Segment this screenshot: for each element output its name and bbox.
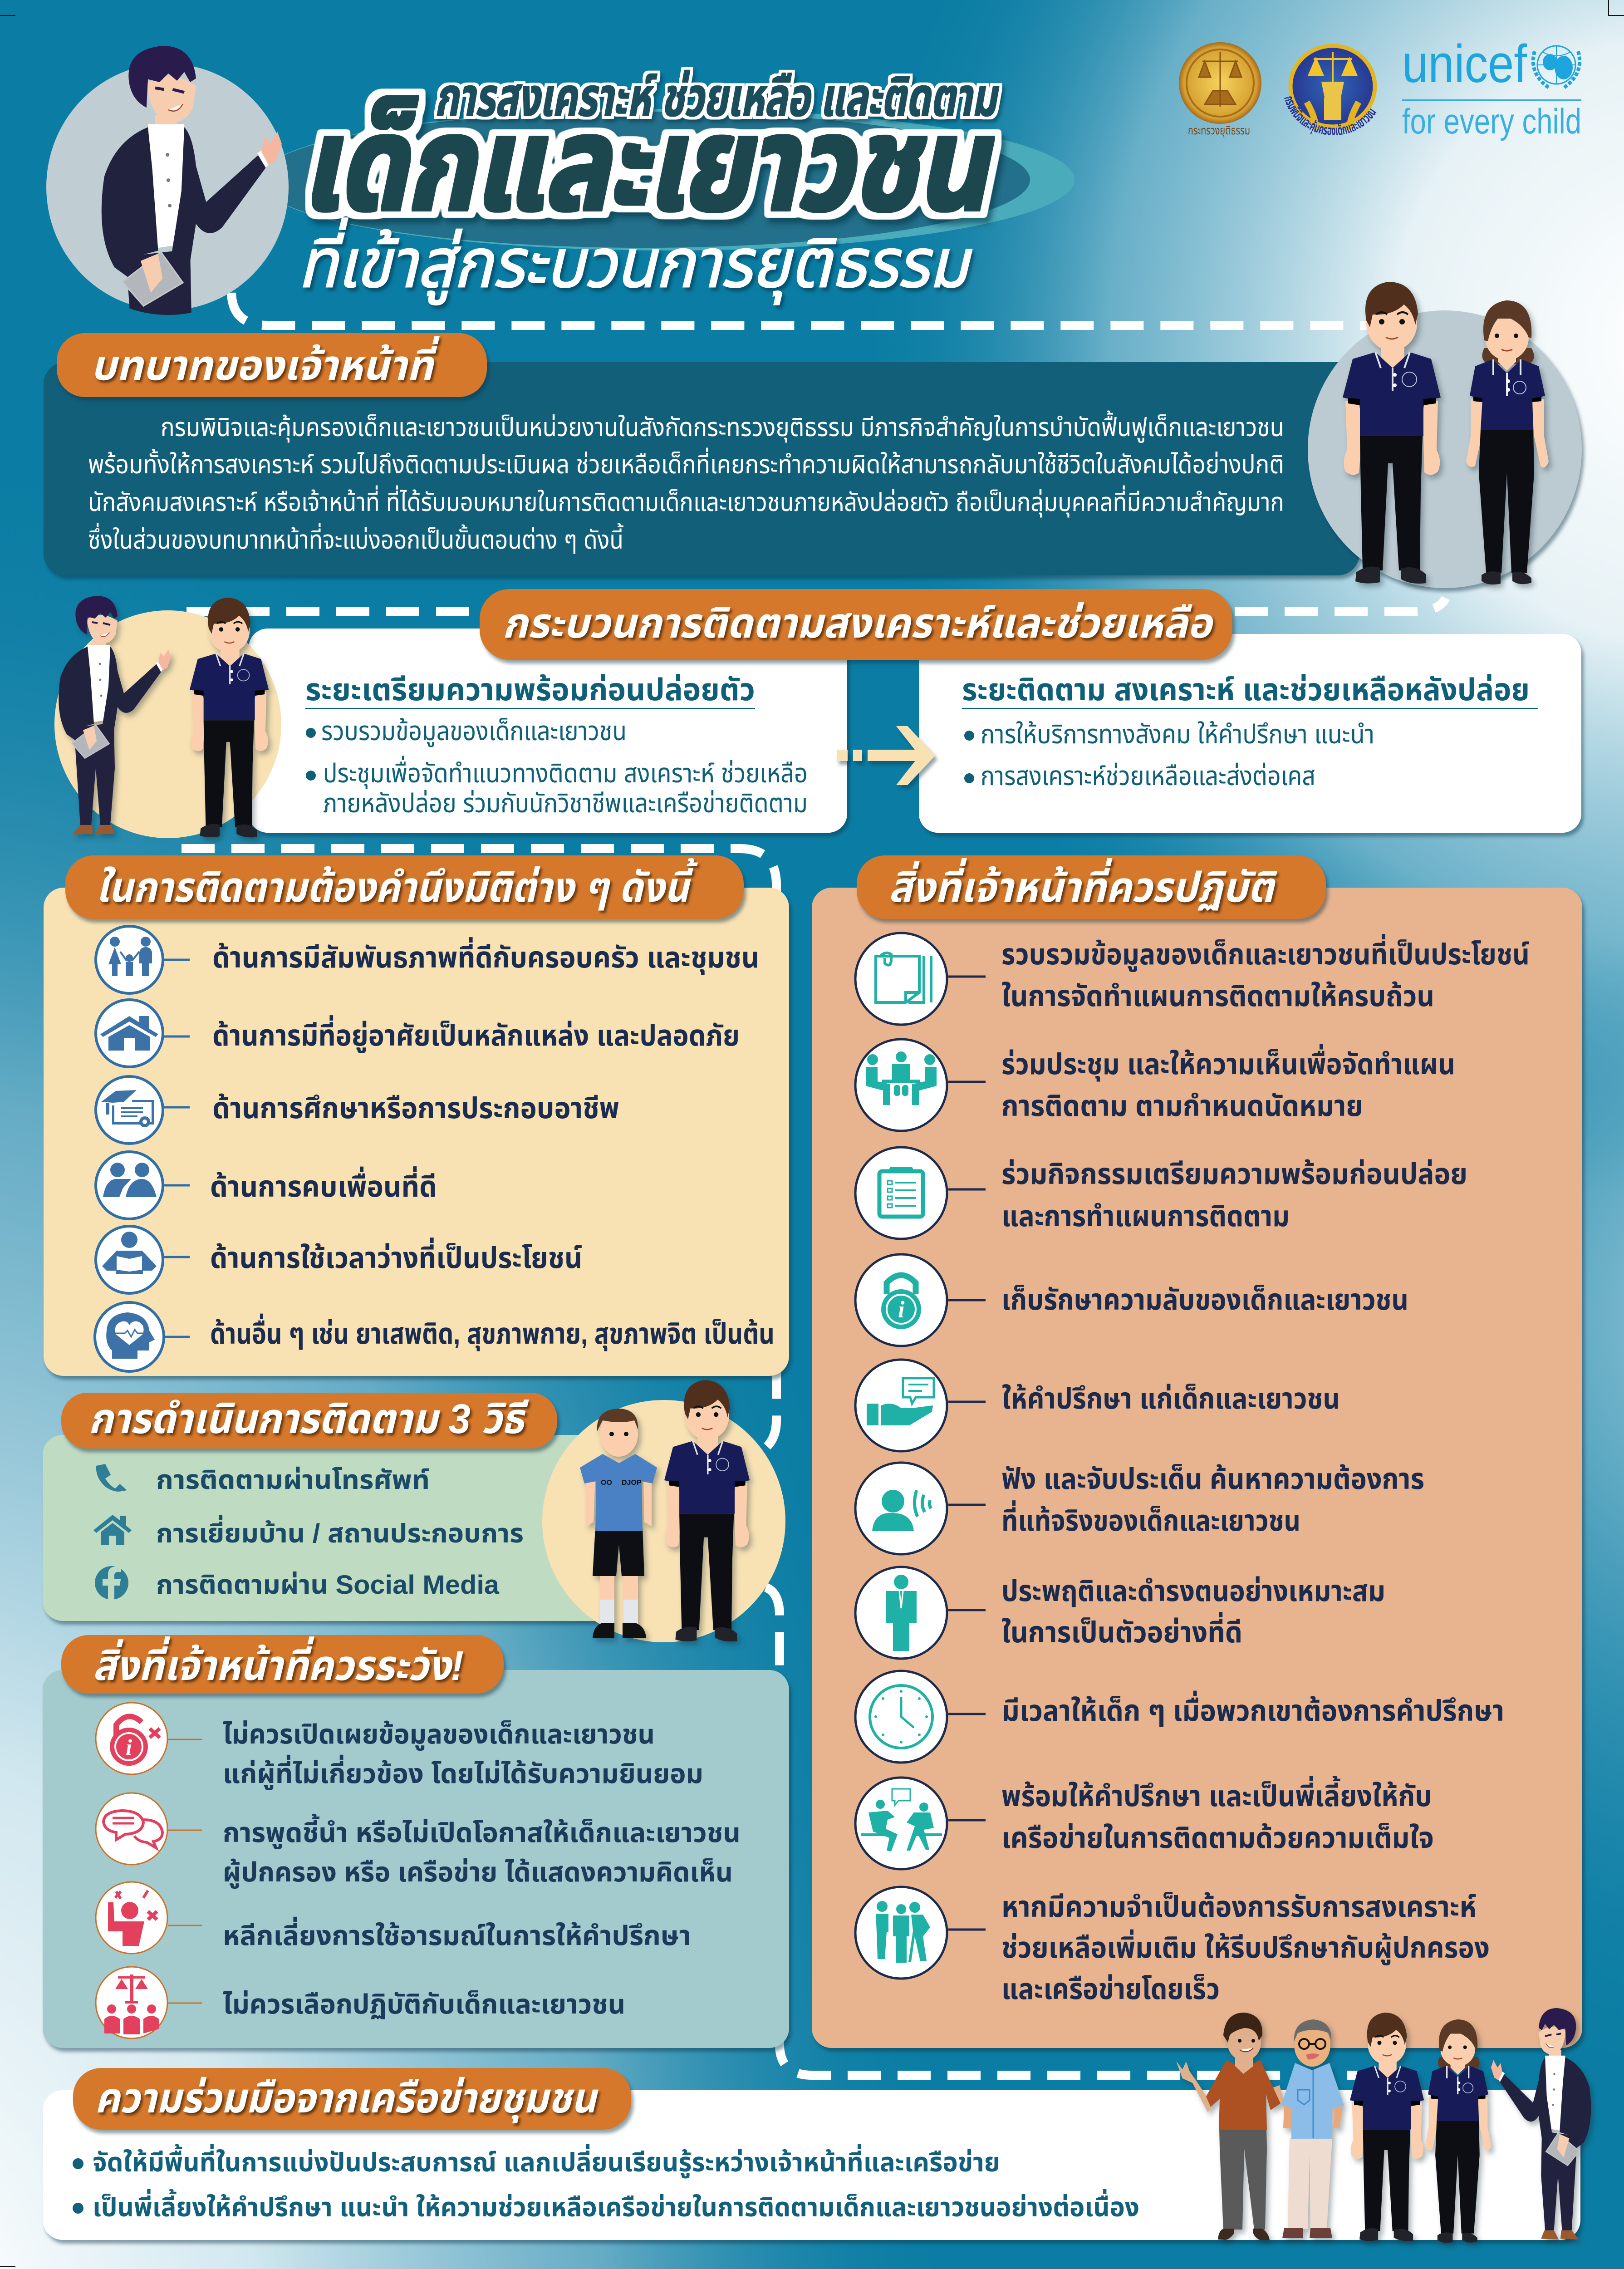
item 3 checklist [855, 1147, 1467, 1239]
item 4 lock [855, 1254, 1408, 1346]
logo: unicef [1402, 34, 1581, 141]
item 10 group [855, 1887, 1490, 2005]
figure: older man in blue shirt [1281, 2019, 1344, 2238]
body text: กรมพินิจและคุ้มครองเด็กและเยาวชนเป็นหน่วยงานในสังกัดกระทรวงยุติธรรม มีภารกิจสำคัญในการบำบัดฟื้นฟูเด็กและเยาวชน [161, 410, 1284, 443]
item 7 role model: ในการเป็นตัวอย่างที่ดี [1001, 1612, 1242, 1649]
method: social media: การติดตามผ่าน Social Media [156, 1570, 500, 1600]
phase bullets: การให้บริการทางสังคม ให้คำปรึกษา แนะนำ [981, 720, 1374, 749]
item 10 group: และเครือข่ายโดยเร็ว [1001, 1973, 1220, 2005]
item: education [96, 1076, 619, 1144]
heading: what officers should do [857, 855, 1326, 919]
item 9 mentor: เครือข่ายในการติดตามด้วยความเต็มใจ [1001, 1822, 1434, 1854]
title line 3: ที่เข้าสู่กระบวนการยุติธรรม [298, 218, 972, 305]
figure: boy: OO [601, 1479, 612, 1487]
item 2 meeting: ร่วมประชุม และให้ความเห็นเพื่อจัดทำแผน [1001, 1044, 1455, 1082]
item 7 role model: ประพฤติและดำรงตนอย่างเหมาะสม [1001, 1575, 1385, 1607]
item 4 lock: เก็บรักษาความลับของเด็กและเยาวชน [1001, 1283, 1408, 1316]
heading: what officers should do: สิ่งที่เจ้าหน้าที่ควรปฏิบัติ [888, 858, 1277, 911]
network bullets: จัดให้มีพื้นที่ในการแบ่งปันประสบการณ์ แลกเปลี่ยนเรียนรู้ระหว่างเจ้าหน้าที่และเครือข่าย [93, 2144, 1000, 2179]
title line 1: การสงเคราะห์ ช่วยเหลือ และติดตาม [435, 68, 999, 128]
logo: ministry of justice: กระทรวงยุติธรรม [1188, 123, 1250, 138]
item 5 advice [855, 1360, 1340, 1451]
caution: discrimination [96, 1967, 625, 2038]
item 8 clock [855, 1671, 1504, 1763]
item 10 group: หากมีความจำเป็นต้องการรับการสงเคราะห์ [1001, 1891, 1477, 1923]
panel: community network [43, 2090, 1580, 2240]
logo: unicef: unicef [1402, 34, 1527, 94]
figures: officers in circle [1308, 282, 1582, 588]
logo: DJOP [1281, 46, 1383, 138]
panel: dimensions [44, 888, 789, 1376]
figure: man in orange shirt [1176, 2013, 1284, 2240]
item 3 checklist: ร่วมกิจกรรมเตรียมความพร้อมก่อนปล่อย [1001, 1158, 1467, 1190]
phase bullets [964, 720, 1374, 791]
caution: leading speech: การพูดชี้นำ หรือไม่เปิดโอกาสให้เด็กและเยาวชน [223, 1813, 741, 1849]
item: free time [96, 1226, 582, 1293]
panel: follow-up phase [919, 634, 1581, 833]
phase heading: ระยะเตรียมความพร้อมก่อนปล่อยตัว [305, 673, 755, 707]
caution: disclosure: i [126, 1734, 132, 1760]
logo: ministry of justice [1179, 42, 1261, 138]
item 10 group: ช่วยเหลือเพิ่มเติม ให้รีบปรึกษากับผู้ปกครอง [1001, 1929, 1490, 1965]
caution: disclosure [96, 1703, 703, 1790]
phase bullets: ภายหลังปล่อย ร่วมกับนักวิชาชีพและเครือข่ายติดตาม [323, 789, 808, 818]
caution: leading speech: ผู้ปกครอง หรือ เครือข่าย ได้แสดงความคิดเห็น [223, 1857, 733, 1889]
item 1 documents: ในการจัดทำแผนการติดตามให้ครบถ้วน [1001, 980, 1434, 1012]
item 2 meeting: การติดตาม ตามกำหนดนัดหมาย [1001, 1090, 1363, 1122]
item: others [95, 1302, 775, 1371]
caution: disclosure: ไม่ควรเปิดเผยข้อมูลของเด็กและเยาวชน [223, 1719, 655, 1751]
caution: leading speech [96, 1793, 741, 1889]
item 8 clock: มีเวลาให้เด็ก ๆ เมื่อพวกเขาต้องการคำปรึกษา [1002, 1690, 1504, 1727]
panel: what to be careful about [43, 1670, 789, 2048]
figures: boy and officer in cream circle [542, 1380, 785, 1642]
network bullets [73, 2144, 1139, 2222]
item: friends: ด้านการคบเพื่อนที่ดี [210, 1166, 437, 1203]
item 6 listening [855, 1463, 1424, 1554]
item: housing: ด้านการมีที่อยู่อาศัยเป็นหลักแหล่ง และปลอดภัย [212, 1015, 740, 1053]
title line 2: เด็กและเยาวชน [302, 91, 995, 238]
figure: female officer [1425, 2019, 1491, 2243]
method: home visit: การเยี่ยมบ้าน / สถานประกอบการ [156, 1515, 524, 1548]
title ellipse backdrop [258, 109, 1074, 250]
body text: นักสังคมสงเคราะห์ หรือเจ้าหน้าที่ ที่ได้รับมอบหมายในการติดตามเด็กและเยาวชนภายหลังปล่อยตัว ถือเป็นกลุ่มบุคคลที่มีความสำคัญมาก [88, 485, 1284, 517]
heading: process: กระบวนการติดตามสงเคราะห์และช่วยเหลือ [502, 600, 1213, 647]
figure: presenter [1491, 2008, 1591, 2240]
panel: preparation phase [249, 629, 847, 833]
item: family relations: ด้านการมีสัมพันธภาพที่ดีกับครอบครัว และชุมชน [212, 937, 759, 975]
caution: disclosure: แก่ผู้ที่ไม่เกี่ยวข้อง โดยไม่ได้รับความยินยอม [223, 1754, 703, 1790]
arrow [837, 726, 935, 785]
item 4 lock: i [898, 1297, 905, 1323]
item 1 documents [855, 933, 1530, 1025]
phase bullets: การสงเคราะห์ช่วยเหลือและส่งต่อเคส [981, 761, 1315, 791]
item: friends [96, 1152, 437, 1219]
item: others: ด้านอื่น ๆ เช่น ยาเสพติด, สุขภาพกาย, สุขภาพจิต เป็นต้น [210, 1313, 775, 1351]
figure: male officer [1350, 2013, 1424, 2241]
method: phone: การติดตามผ่านโทรศัพท์ [156, 1465, 430, 1495]
item: free time: ด้านการใช้เวลาว่างที่เป็นประโยชน์ [210, 1238, 582, 1274]
item 5 advice: ให้คำปรึกษา แก่เด็กและเยาวชน [1002, 1382, 1340, 1415]
phase bullets [306, 717, 808, 818]
panel: three follow-up methods [43, 1435, 633, 1621]
title [298, 68, 999, 305]
unicef globe [1533, 46, 1580, 88]
item: housing [96, 1000, 740, 1067]
item 9 mentor: พร้อมให้คำปรึกษา และเป็นพี่เลี้ยงให้กับ [1001, 1776, 1432, 1812]
item 2 meeting [855, 1039, 1455, 1131]
body text: พร้อมทั้งให้การสงเคราะห์ รวมไปถึงติดตามประเมินผล ช่วยเหลือเด็กที่เคยกระทำความผิดให้สามารถกลับมาใช้ชีวิตในสังคมได้อย่างปกติ [88, 447, 1284, 479]
item 9 mentor [855, 1776, 1434, 1869]
item 6 listening: ฟัง และจับประเด็น ค้นหาความต้องการ [1001, 1463, 1424, 1495]
logo: unicef: for every child [1402, 101, 1581, 141]
item 6 listening: ที่แท้จริงของเด็กและเยาวชน [1001, 1500, 1300, 1537]
caution: discrimination: ไม่ควรเลือกปฏิบัติกับเด็กและเยาวชน [223, 1989, 625, 2019]
item: education: ด้านการศึกษาหรือการประกอบอาชีพ [212, 1092, 619, 1125]
caution: emotions [96, 1882, 691, 1954]
panel: what officers should do [812, 888, 1582, 2048]
network bullets: เป็นพี่เลี้ยงให้คำปรึกษา แนะนำ ให้ความช่วยเหลือเครือข่ายในการติดตามเด็กและเยาวชนอย่างต่อเนื่อง [93, 2189, 1139, 2222]
heading: three methods: การดำเนินการติดตาม 3 วิธี [88, 1396, 530, 1442]
caution: emotions: หลีกเลี่ยงการใช้อารมณ์ในการให้คำปรึกษา [223, 1916, 691, 1951]
heading: dimensions: ในการติดตามต้องคำนึงมิติต่าง ๆ ดังนี้ [96, 858, 698, 911]
body text: ซึ่งในส่วนของบทบาทหน้าที่จะแบ่งออกเป็นขั้นตอนต่าง ๆ ดังนี้ [88, 523, 623, 554]
phase bullets: รวบรวมข้อมูลของเด็กและเยาวชน [321, 717, 627, 747]
phase heading: ระยะติดตาม สงเคราะห์ และช่วยเหลือหลังปล่อย [962, 673, 1530, 707]
figures: presenter and officer in cream circle [54, 596, 281, 838]
heading: process [480, 589, 1232, 660]
panel: role of officers [44, 362, 1359, 575]
phase bullets: ประชุมเพื่อจัดทำแนวทางติดตาม สงเคราะห์ ช่วยเหลือ [323, 756, 808, 789]
item 3 checklist: และการทำแผนการติดตาม [1001, 1200, 1290, 1233]
figure: presenter in circle [46, 46, 289, 315]
heading: dimensions [65, 855, 744, 919]
figure: boy: DJOP [622, 1479, 642, 1487]
figure: boy [580, 1409, 657, 1638]
item 7 role model [855, 1567, 1385, 1659]
body text [88, 410, 1284, 554]
item: family relations [96, 926, 759, 993]
heading: community network: ความร่วมมือจากเครือข่ายชุมชน [95, 2075, 599, 2124]
logo: DJOP: กรมพินิจและคุ้มครองเด็กและเยาวชน [1281, 94, 1379, 138]
item 1 documents: รวบรวมข้อมูลของเด็กและเยาวชนที่เป็นประโยชน์ [1001, 934, 1530, 972]
heading: role [57, 333, 487, 397]
heading: role: บทบาทของเจ้าหน้าที่ [91, 336, 440, 389]
dashed connectors [182, 293, 1446, 2075]
figures: community group [1176, 2008, 1591, 2243]
heading: caution: สิ่งที่เจ้าหน้าที่ควรระวัง! [93, 1636, 464, 1689]
